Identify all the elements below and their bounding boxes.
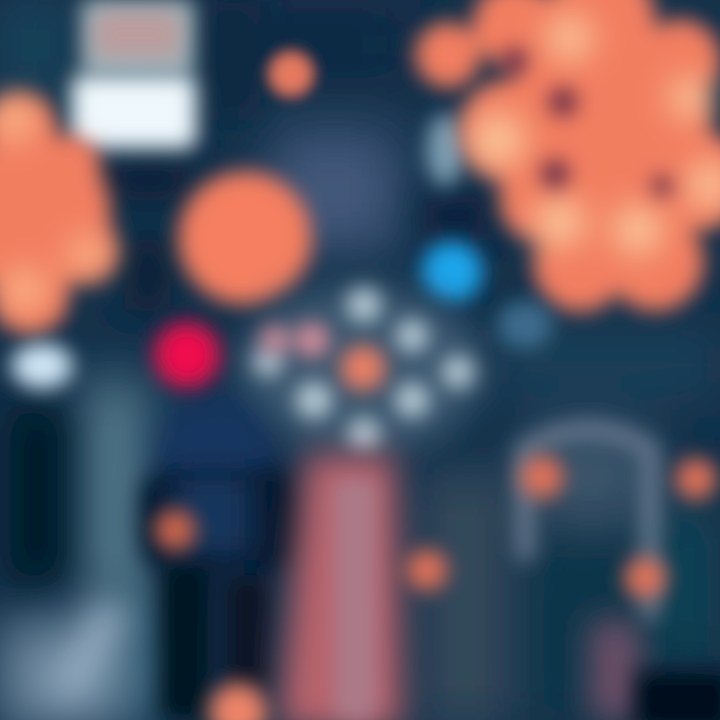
panel: pale building top left — [72, 0, 196, 148]
icon: salmon dot on figure — [155, 510, 195, 550]
icon: salmon cluster left — [0, 94, 117, 333]
dark corner bottom right — [635, 672, 720, 720]
icon: large salmon cluster top right — [416, 0, 720, 311]
panel: arch frame right — [525, 430, 650, 620]
dot ring chart — [235, 285, 485, 455]
panel: pink column — [278, 455, 402, 720]
pink lower right block — [590, 620, 640, 720]
figure: dark person — [140, 395, 305, 720]
pale glow centre top — [427, 114, 463, 186]
icon: salmon blob middle — [179, 172, 311, 304]
dark vertical bars left — [5, 0, 490, 585]
pale glow under left cluster — [12, 344, 72, 388]
icon: salmon dot in ring — [341, 346, 385, 390]
pale streak bottom left — [50, 600, 130, 700]
icon: small salmon dot top — [269, 52, 313, 96]
pale blue glow right of ring — [497, 301, 553, 349]
markers: salmon dots lower right — [407, 456, 716, 598]
icon: salmon dot bottom — [210, 684, 266, 720]
icon: bright blue circle — [422, 242, 482, 302]
icon: red circle — [155, 323, 219, 387]
